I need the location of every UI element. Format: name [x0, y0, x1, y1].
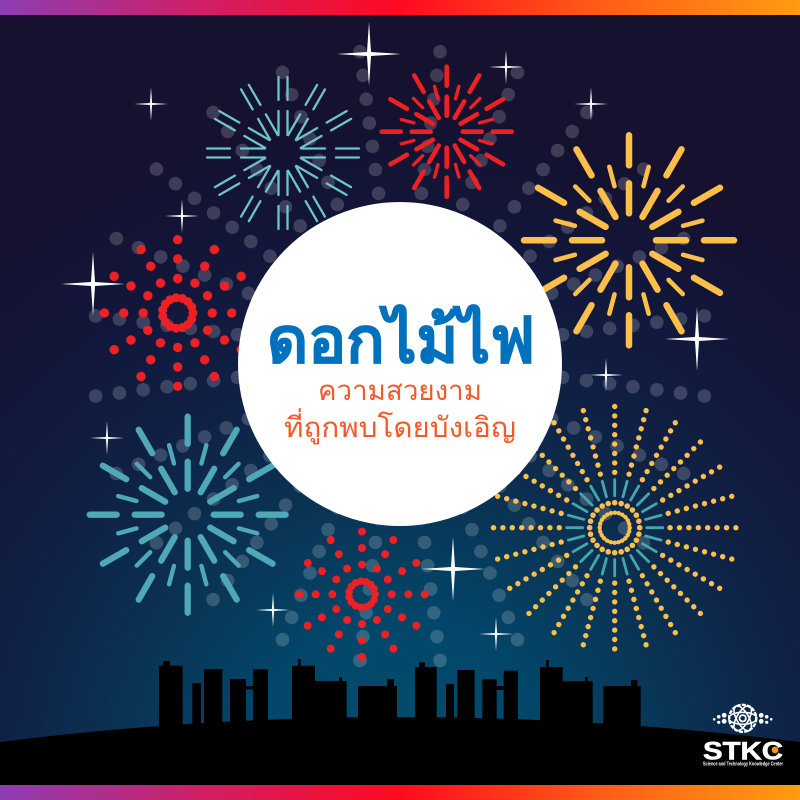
top gradient bar	[0, 0, 800, 15]
logo wordmark: STKC	[703, 738, 783, 766]
firework: red dots, left	[100, 235, 256, 391]
firework: yellow dotted with teal rays, right	[490, 403, 739, 652]
sparkle stars	[61, 22, 729, 651]
firework: red dots, bottom centre	[295, 528, 429, 661]
firework: teal outlined, top left	[207, 77, 359, 229]
background bokeh dot burst	[86, 42, 714, 670]
logo orange dot	[772, 747, 778, 753]
subtitle line 1: ความสวยงาม	[318, 375, 482, 406]
STKC logo	[703, 703, 783, 768]
firework: red lines, top centre	[382, 67, 512, 197]
title: ดอกไม้ไฟ	[267, 304, 535, 376]
logo icon: atom	[713, 703, 772, 733]
firework: teal lines, bottom left	[90, 417, 286, 613]
city skyline silhouette on hill	[0, 659, 800, 785]
central white circle	[238, 202, 562, 526]
bottom gradient bar	[0, 785, 800, 800]
subtitle line 2: ที่ถูกพบโดยบังเอิญ	[284, 408, 516, 445]
firework: yellow lines, top right	[524, 135, 734, 345]
